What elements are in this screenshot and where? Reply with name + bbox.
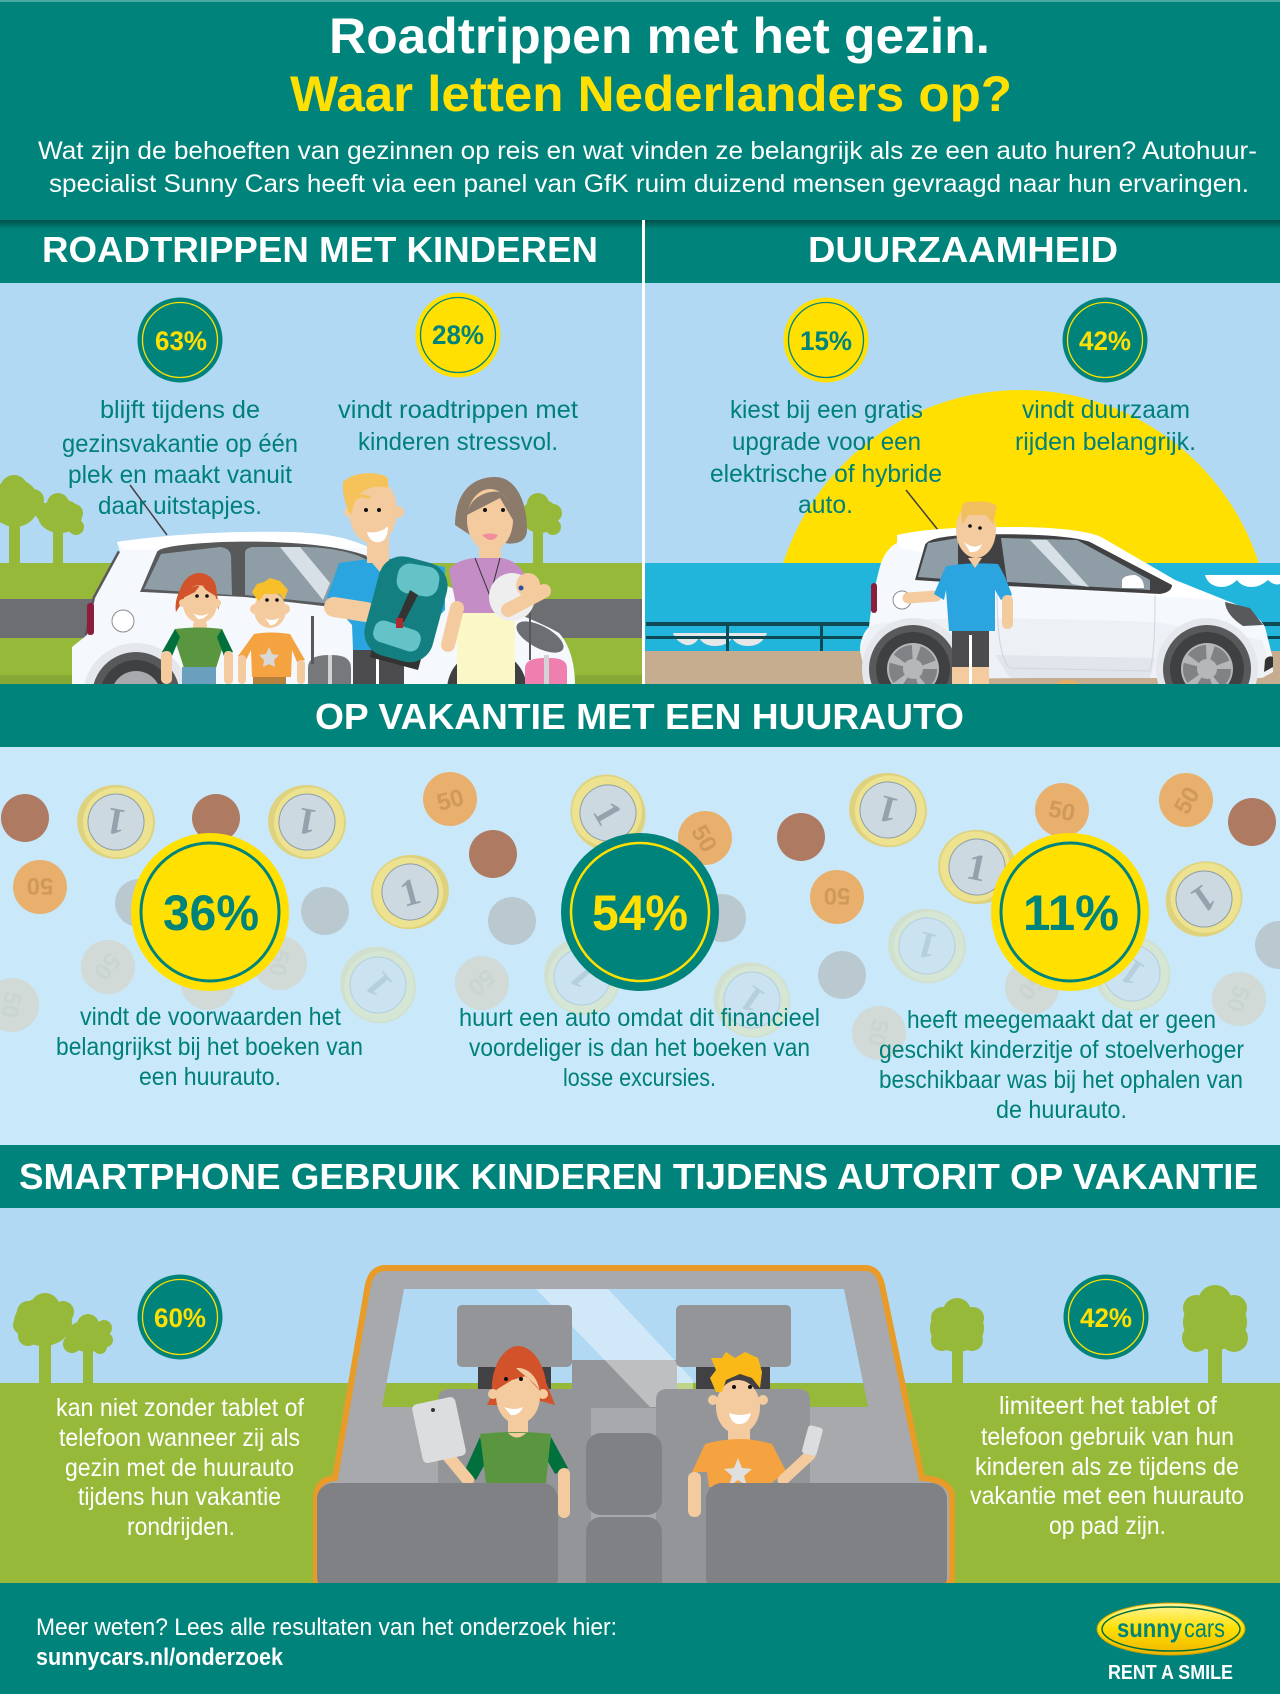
stat: 15% xyxy=(784,298,868,382)
text: 42% xyxy=(1015,396,1196,456)
trees left xyxy=(0,475,84,565)
stat: 54% xyxy=(561,833,719,991)
text: 28%: kinderen stressvol. xyxy=(358,428,558,456)
panel: footer xyxy=(0,1583,1280,1694)
railing xyxy=(646,622,1280,651)
coins: 1 xyxy=(294,799,320,843)
stat: 42%: 42% xyxy=(1079,326,1131,356)
white car xyxy=(860,490,1273,720)
coins: 1 xyxy=(103,799,129,843)
tree right xyxy=(521,493,562,565)
logo: sunny cars: sunny xyxy=(1117,1613,1182,1643)
text: 60%: kan niet zonder tablet of xyxy=(56,1394,304,1422)
coins: 50 xyxy=(434,784,467,817)
road and grass background xyxy=(0,563,642,684)
text: 63% xyxy=(62,396,298,520)
trees left xyxy=(13,1293,113,1385)
white car xyxy=(72,485,575,749)
coins: 50 xyxy=(462,963,500,1001)
text: 36%: vindt de voorwaarden het xyxy=(80,1003,341,1031)
text: 63%: plek en maakt vanuit xyxy=(68,461,292,489)
text: 42%: limiteert het tablet of xyxy=(999,1392,1217,1420)
text: 54%: losse excursies. xyxy=(563,1064,716,1092)
girl with tablet xyxy=(411,1346,570,1518)
logo: sunny cars: cars xyxy=(1184,1613,1225,1643)
section bar: smartphone gebruik: SMARTPHONE GEBRUIK KINDEREN TIJDENS AUTORIT OP VAKANTIE xyxy=(19,1156,1258,1197)
coins: 1 xyxy=(561,956,605,997)
coins: 50 xyxy=(824,882,850,909)
coins: 1 xyxy=(913,922,942,968)
section bar: smartphone gebruik xyxy=(0,1145,1280,1208)
coins: 1 xyxy=(584,795,630,832)
coins: 50 xyxy=(1046,795,1078,827)
coins: 1 xyxy=(733,977,772,1022)
stat: 54%: 54% xyxy=(592,885,688,941)
panel: duurzaamheid xyxy=(645,283,1280,684)
coins: 50 xyxy=(1220,981,1255,1016)
text: 11%: beschikbaar was bij het ophalen van xyxy=(879,1066,1243,1094)
text: 63%: gezinsvakantie op één xyxy=(62,430,298,458)
sea and beach xyxy=(645,563,1280,684)
stat: 28%: 28% xyxy=(432,320,484,350)
car interior xyxy=(316,1268,952,1597)
text: 28% xyxy=(338,396,578,456)
text: 42%: rijden belangrijk. xyxy=(1015,428,1196,456)
stat: 11% xyxy=(991,833,1149,991)
section bar: op vakantie met een huurauto: OP VAKANTIE MET EEN HUURAUTO xyxy=(315,696,964,737)
title: Roadtrippen met het gezin. xyxy=(329,8,990,64)
text: 36% xyxy=(56,1003,363,1091)
coins: 50 xyxy=(263,947,294,978)
coins: 1 xyxy=(874,786,903,832)
coins: 50 xyxy=(862,1017,893,1048)
boy with phone xyxy=(688,1352,823,1517)
stat: 42%: 42% xyxy=(1080,1303,1132,1333)
stat: 28% xyxy=(416,292,500,378)
coins: 1 xyxy=(357,964,401,1005)
footer text xyxy=(36,1614,617,1671)
stat: 36%: 36% xyxy=(163,885,259,941)
text: 42% xyxy=(970,1392,1244,1540)
boy xyxy=(238,578,305,684)
woman with baby xyxy=(448,477,544,684)
text: 36%: een huurauto. xyxy=(139,1063,281,1091)
boats xyxy=(673,575,1280,646)
front seats xyxy=(317,1483,947,1593)
coins xyxy=(0,761,1280,1064)
stat: 63% xyxy=(138,298,222,382)
divider xyxy=(642,220,645,684)
text: 60%: telefoon wanneer zij als xyxy=(59,1424,300,1452)
stat: 36% xyxy=(131,833,289,991)
panel: roadtrippen met kinderen xyxy=(0,283,642,749)
text: 42%: telefoon gebruik van hun xyxy=(981,1423,1234,1451)
stat: 42% xyxy=(1064,1274,1148,1360)
man with child seat xyxy=(327,473,453,684)
text: 54%: voordeliger is dan het boeken van xyxy=(469,1034,810,1062)
logo: sunny cars: RENT A SMILE xyxy=(1108,1662,1233,1684)
text: 11%: heeft meegemaakt dat er geen xyxy=(907,1006,1216,1034)
text: 54% xyxy=(459,1004,820,1092)
text: 60%: tijdens hun vakantie xyxy=(78,1483,281,1511)
heading: roadtrippen met kinderen: ROADTRIPPEN MET KINDEREN xyxy=(42,229,598,270)
stat: 42% xyxy=(1062,298,1148,382)
intro text: specialist Sunny Cars heeft via een panel van GfK ruim duizend mensen gevraagd naar hun ervaringen. xyxy=(49,170,1249,198)
man xyxy=(908,502,1013,684)
coins: 1 xyxy=(963,845,990,890)
text: 15%: kiest bij een gratis xyxy=(730,396,923,424)
logo: sunny cars xyxy=(1097,1603,1245,1684)
intro text: Wat zijn de behoeften van gezinnen op reis en wat vinden ze belangrijk als ze een auto huren? Autohuur- xyxy=(38,137,1257,165)
stat: 60%: 60% xyxy=(154,1303,206,1333)
text: 42%: vindt duurzaam xyxy=(1022,396,1190,424)
text: 60% xyxy=(56,1394,304,1541)
title xyxy=(290,8,1012,122)
text: 60%: gezin met de huurauto xyxy=(65,1454,294,1482)
suitcase grey xyxy=(308,616,351,684)
sun xyxy=(783,390,1259,563)
coins: 1 xyxy=(1184,876,1223,921)
coins: 50 xyxy=(1012,967,1050,1005)
text: 15% xyxy=(710,396,942,519)
stat: 11%: 11% xyxy=(1023,885,1119,941)
panel: op vakantie met een huurauto xyxy=(0,746,1280,1145)
suitcase pink xyxy=(525,605,567,684)
text: 60%: rondrijden. xyxy=(127,1513,235,1541)
coins: 50 xyxy=(27,872,53,899)
text: 54%: huurt een auto omdat dit financieel xyxy=(459,1004,820,1032)
footer text: Meer weten? Lees alle resultaten van het onderzoek hier: xyxy=(36,1614,617,1641)
text: 63%: blijft tijdens de xyxy=(100,396,260,424)
text: 11%: de huurauto. xyxy=(996,1096,1127,1124)
trees right xyxy=(930,1285,1248,1385)
text: 28%: vindt roadtrippen met xyxy=(338,396,578,424)
text: 36%: belangrijkst bij het boeken van xyxy=(56,1033,363,1061)
title: Waar letten Nederlanders op? xyxy=(290,66,1012,122)
coins: 50 xyxy=(1169,782,1206,819)
coins: 50 xyxy=(685,820,722,857)
stat: 60% xyxy=(138,1274,222,1360)
text: 15%: elektrische of hybride xyxy=(710,460,942,488)
text: 63%: daar uitstapjes. xyxy=(98,492,262,520)
intro text xyxy=(38,137,1257,198)
panel: smartphone gebruik xyxy=(0,1207,1280,1597)
section bar: op vakantie met een huurauto xyxy=(0,684,1280,747)
panel: header xyxy=(0,0,1280,220)
coins: 1 xyxy=(1113,950,1152,995)
heading: duurzaamheid: DUURZAAMHEID xyxy=(808,229,1118,270)
coins: 1 xyxy=(396,870,425,916)
text: 15%: auto. xyxy=(798,491,853,519)
text: 42%: op pad zijn. xyxy=(1049,1512,1166,1540)
stat: 63%: 63% xyxy=(155,326,207,356)
girl xyxy=(161,573,233,684)
section bar: roadtrippen and duurzaamheid xyxy=(0,220,1280,283)
text: 15%: upgrade voor een xyxy=(732,428,921,456)
text: 42%: vakantie met een huurauto xyxy=(970,1482,1244,1510)
text: 42%: kinderen als ze tijdens de xyxy=(975,1453,1239,1481)
text: 11% xyxy=(879,1006,1244,1124)
text: 11%: geschikt kinderzitje of stoelverhoger xyxy=(879,1036,1244,1064)
stat: 15%: 15% xyxy=(800,326,852,356)
footer text: sunnycars.nl/onderzoek xyxy=(36,1644,284,1671)
coins: 50 xyxy=(88,947,126,985)
